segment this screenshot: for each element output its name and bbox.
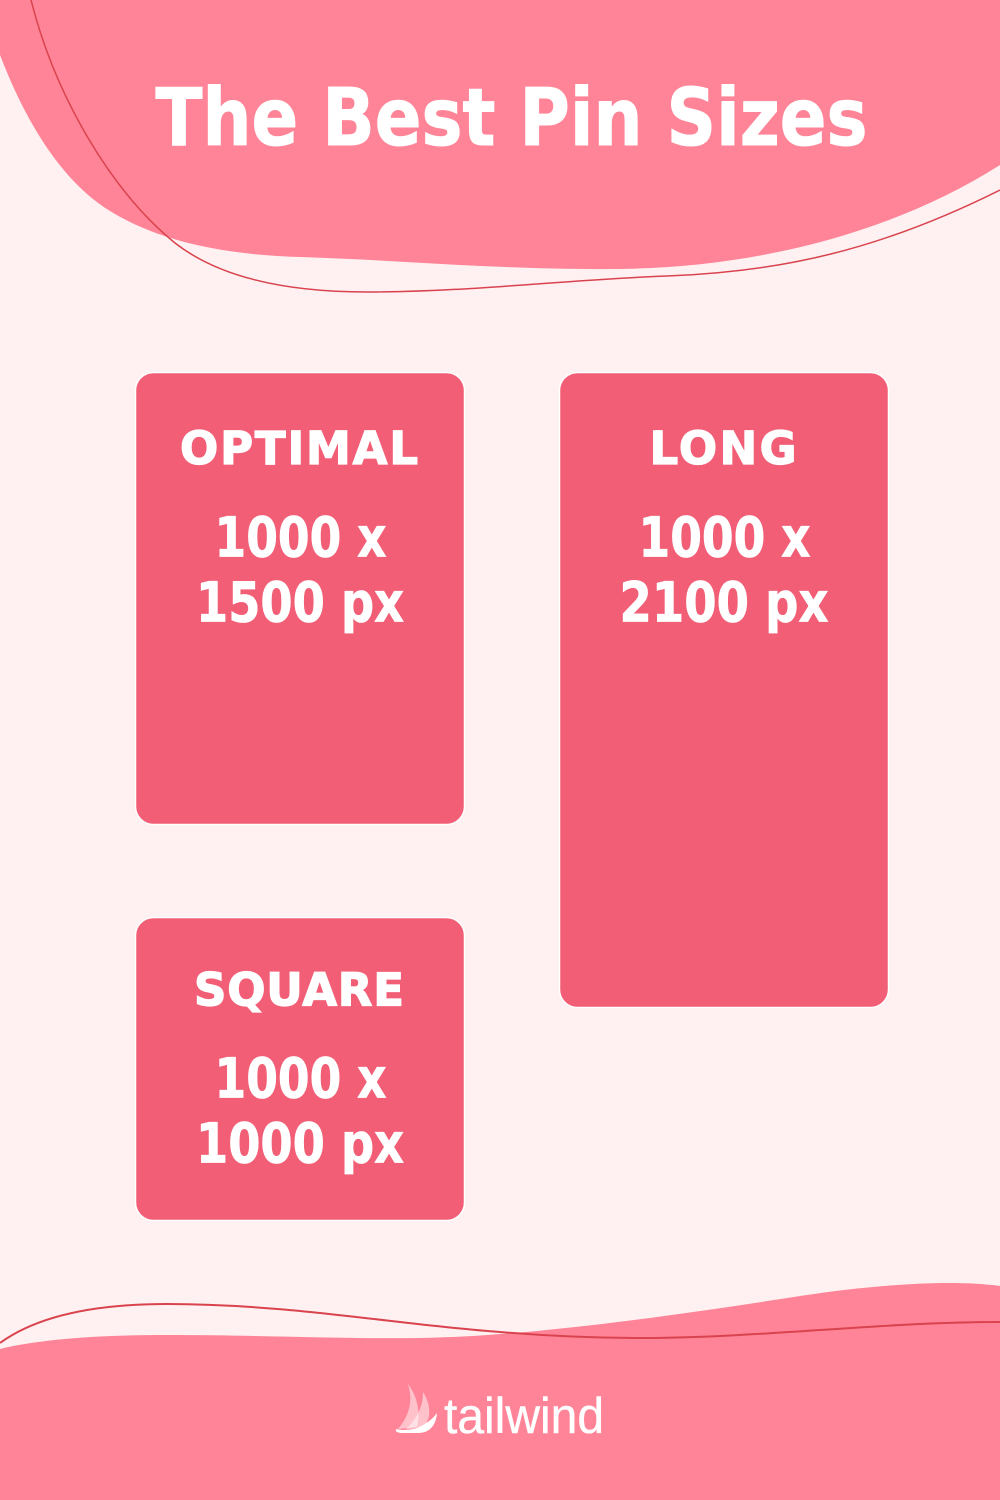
long sizes: 2100 px [620,570,828,634]
top wave line [31,0,1000,292]
panel: optimal [136,372,464,824]
long sizes [620,506,828,634]
bottom wave [0,1283,1000,1500]
panel: square [136,918,464,1220]
icon: sails [396,1384,437,1433]
wordmark: tailwind [444,1388,604,1444]
title: The Best Pin Sizes [156,72,868,164]
long sizes: 1000 x [638,506,810,570]
bottom wave line [0,1304,1000,1343]
long heading: LONG [650,422,796,475]
square sizes [196,1046,404,1176]
square sizes: 1000 px [196,1112,404,1176]
optimal sizes [196,506,404,634]
square heading: SQUARE [194,964,404,1016]
optimal sizes: 1500 px [196,570,404,634]
top wave [0,0,1000,269]
square sizes: 1000 x [214,1046,386,1110]
panel: long [560,372,888,1008]
optimal heading: OPTIMAL [180,422,418,475]
optimal sizes: 1000 x [214,506,386,570]
tailwind logo [396,1384,604,1444]
